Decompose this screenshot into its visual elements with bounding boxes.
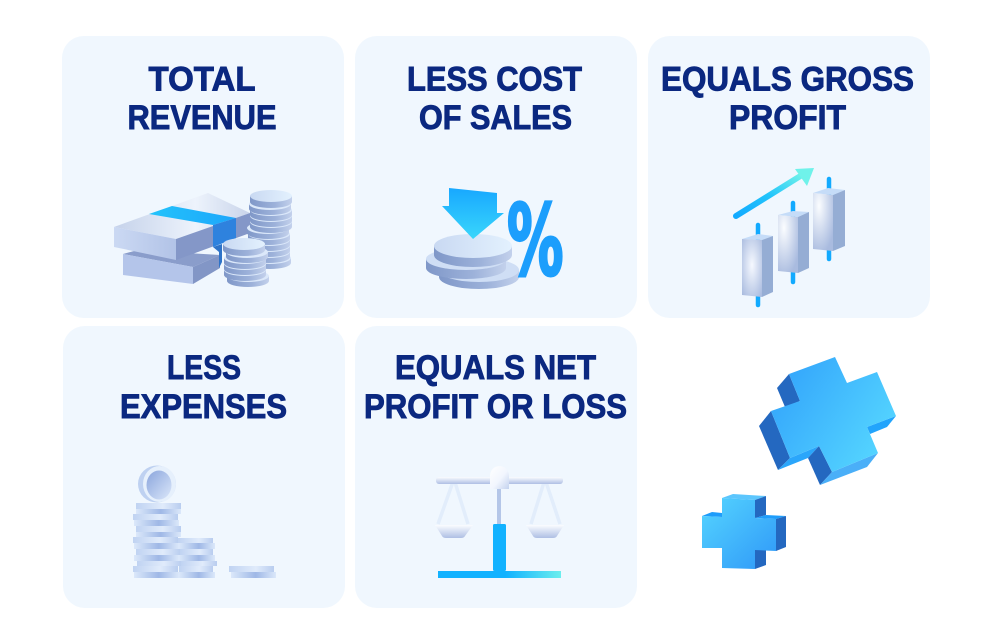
heading: less cost of sales [407,60,582,137]
icon: balance scale [435,466,564,578]
icon: large plus [759,357,896,485]
heading: total revenue: TOTAL [148,60,256,98]
panel: equals gross profit [648,36,930,318]
panel: total revenue [62,36,344,318]
panel: equals net profit or loss [355,326,637,608]
icon: down arrow, coins and percent [426,184,564,298]
heading: less expenses [120,349,287,426]
heading: total revenue: REVENUE [128,99,276,137]
heading: total revenue [128,60,276,137]
heading: less cost of sales: OF SALES [419,99,572,137]
heading: less expenses: LESS [167,349,241,387]
panel: less expenses [63,326,345,608]
heading: equals net profit or loss: PROFIT OR LOSS [364,388,627,426]
heading: less cost of sales: LESS COST [407,60,582,98]
heading: equals gross profit [661,60,914,137]
panel: less cost of sales [355,36,637,318]
heading: equals gross profit: PROFIT [729,99,846,137]
heading: equals net profit or loss: EQUALS NET [395,349,596,387]
icon: rising candlesticks with arrow [736,168,845,305]
heading: equals net profit or loss [364,349,627,426]
icon: small plus [702,494,786,569]
heading: less expenses: EXPENSES [120,388,287,426]
icon: down arrow, coins and percent: % [507,184,564,298]
icon: banknote stacks and coins [114,190,292,287]
icon: shrinking coin stacks [133,466,276,578]
heading: equals gross profit: EQUALS GROSS [661,60,914,98]
